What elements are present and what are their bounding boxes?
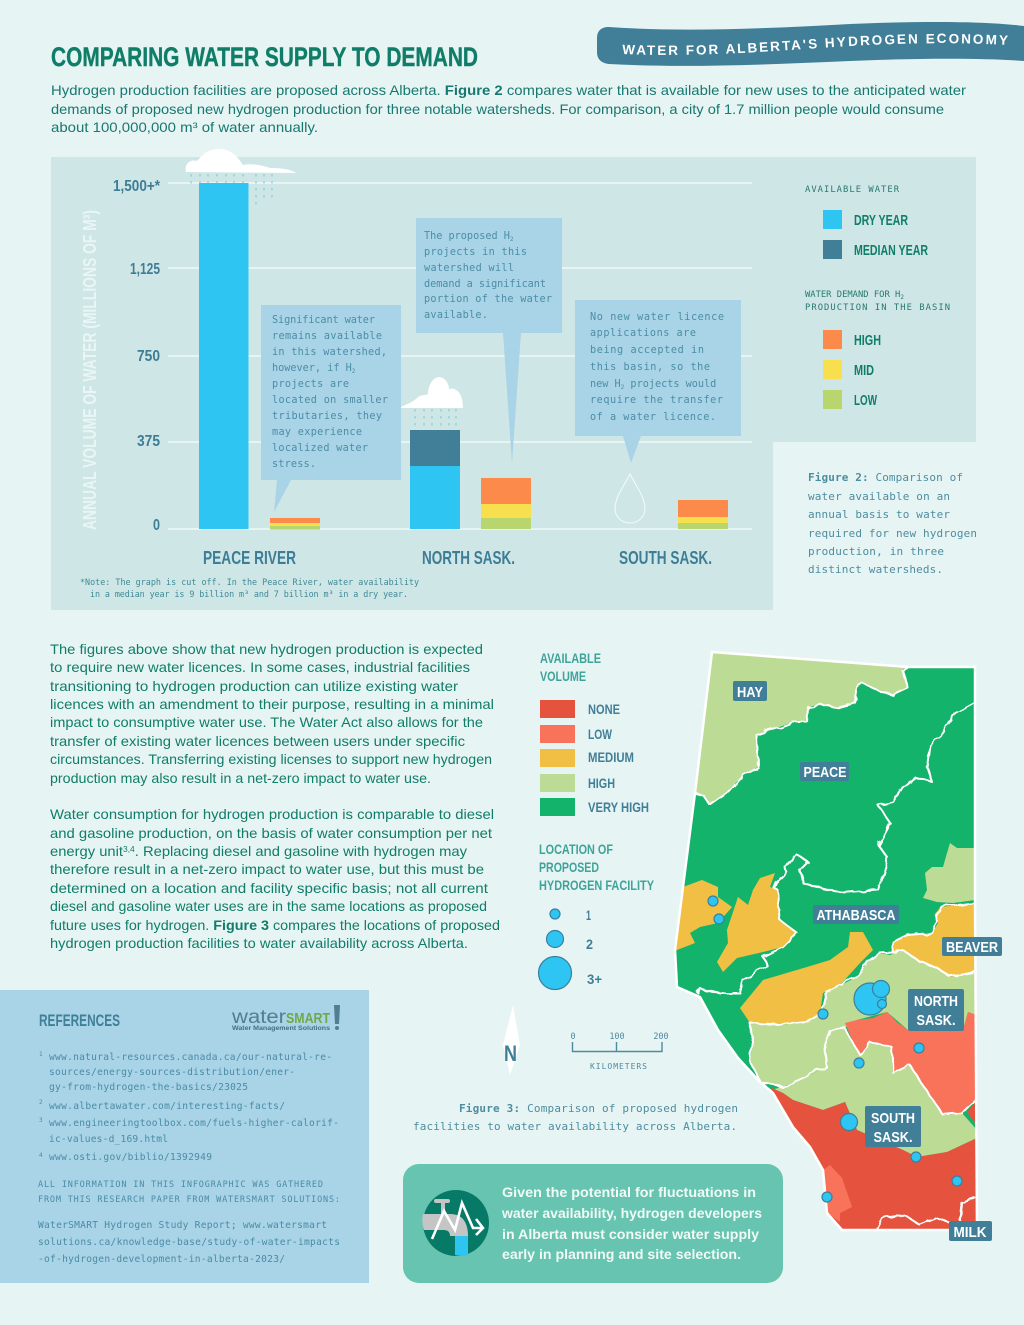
bar: North Sask demand — [481, 478, 531, 529]
footnote — [80, 577, 419, 599]
callout: North Sask: projects in this — [424, 247, 527, 258]
region: medium centre — [740, 932, 873, 1025]
y axis tick labels: 375 — [137, 433, 160, 450]
region: medium west 2 — [717, 873, 797, 972]
text block: diesel and gasoline comparison: determined on a location and facility specific basis; not all current — [50, 880, 488, 896]
icon: tap with fluctuating line — [422, 1190, 489, 1256]
map: Alberta water availability — [675, 652, 1002, 1241]
banner: water for Alberta's hydrogen economy — [597, 22, 1024, 66]
text block: diesel and gasoline comparison: and gasoline production, on the basis of water consumption per net — [50, 825, 492, 841]
legend: chart: HIGH — [854, 333, 881, 349]
banner: water for Alberta's hydrogen economy: WATER FOR ALBERTA'S HYDROGEN ECONOMY — [622, 34, 1008, 55]
bar: Peace River dry year — [199, 183, 248, 529]
scale bar: 100 — [609, 1032, 625, 1042]
callout: key takeaway: early in planning and site selection. — [502, 1247, 741, 1262]
reference list: 4 — [39, 1152, 43, 1159]
scale bar: 200 — [653, 1032, 669, 1042]
logo: waterSMART: water — [231, 1007, 287, 1028]
legend: proposed hydrogen facility: PROPOSED — [539, 859, 599, 875]
callout: North Sask: 2 — [510, 236, 514, 243]
callout: Peace River: remains available — [272, 331, 382, 342]
basin labels: SOUTH — [871, 1110, 915, 1127]
text block: new licences: licences with an amendment to their purpose, resulting in a minimal — [50, 696, 494, 712]
text block: new licences: production may also result in a net-zero impact to water use. — [50, 770, 431, 786]
callout: South Sask: require the transfer — [590, 395, 723, 406]
text block: new licences: impact to consumptive water use. The Water Act also allows for the — [50, 714, 483, 730]
figure 3 caption: facilities to water availability across Alberta. — [413, 1120, 737, 1133]
region: low southwest — [823, 1165, 852, 1222]
region: none east sliver — [967, 1100, 977, 1126]
legend: chart: 2 — [900, 294, 904, 301]
legend: available volume: VOLUME — [540, 668, 586, 684]
reference list: 1 — [39, 1051, 43, 1058]
reference list: sources/energy-sources-distribution/ener- — [49, 1067, 295, 1078]
references heading: REFERENCES — [39, 1011, 120, 1030]
region: South Sask — [770, 1028, 977, 1157]
logo: waterSMART: Water Management Solutions — [232, 1025, 330, 1032]
legend: available volume: MEDIUM — [588, 749, 634, 765]
text block: new licences: circumstances. Transferring existing licenses to support new hydrogen — [50, 751, 492, 767]
intro text block: Hydrogen production facilities are proposed across Alberta. Figure 2 compares water that is available for new uses to the anticipated water — [51, 82, 966, 98]
legend: chart: PRODUCTION IN THE BASIN — [805, 303, 950, 313]
figure 2 caption — [808, 471, 977, 576]
y axis tick labels: 0 — [153, 517, 160, 534]
icon: rain cloud over North Sask — [399, 377, 463, 430]
x axis labels: PEACE RIVER — [203, 548, 296, 568]
region: Hay — [695, 652, 908, 805]
callout: Peace River: in this watershed, — [272, 347, 387, 358]
callout: South Sask — [575, 300, 741, 463]
basin labels: NORTH — [914, 993, 958, 1010]
text block: diesel and gasoline comparison: hydrogen production facilities to water availability across Alberta. — [50, 935, 468, 951]
region: Beaver — [892, 903, 975, 977]
basin labels: BEAVER — [946, 939, 998, 956]
legend: available volume: NONE — [588, 701, 620, 717]
title: COMPARING WATER SUPPLY TO DEMAND — [51, 42, 478, 72]
legend: chart: DRY YEAR — [854, 213, 908, 229]
callout: key takeaway: water availability, hydrogen developers — [501, 1206, 762, 1221]
scale bar: 0 — [570, 1032, 576, 1042]
figure 2 caption: Figure 2: Comparison of — [808, 471, 963, 484]
panel: references — [0, 990, 369, 1283]
intro text block: about 100,000,000 m³ of water annually. — [51, 119, 318, 135]
legend: available volume: HIGH — [588, 775, 615, 791]
reference list: www.albertawater.com/interesting-facts/ — [49, 1101, 285, 1112]
legend: proposed hydrogen facility: LOCATION OF — [539, 841, 613, 857]
x axis labels — [203, 548, 712, 568]
region: North Sask — [750, 950, 976, 1087]
legend: proposed hydrogen facility: 2 — [586, 936, 593, 952]
callout: South Sask: this basin, so the — [590, 362, 710, 373]
reference list: www.osti.gov/biblio/1392949 — [49, 1152, 212, 1163]
region: low east — [845, 1012, 977, 1115]
scale bar: KILOMETERS — [590, 1062, 647, 1071]
callout: North Sask: watershed will — [424, 263, 514, 274]
icon: rain cloud over Peace River — [186, 149, 296, 206]
callout: Peace River: however, if H — [272, 363, 352, 374]
intro text block: demands of proposed new hydrogen production for three notable watersheds. For comparison, a city of 1.7 million people would consume — [51, 101, 944, 117]
callout: Peace River: tributaries, they — [272, 411, 382, 422]
callout: Peace River: projects are — [272, 379, 349, 390]
icon: empty water drop — [615, 474, 645, 523]
legend: proposed hydrogen facility: 3+ — [587, 971, 602, 987]
icon: north arrow: N — [504, 1041, 517, 1066]
figure 2 caption: required for new hydrogen — [808, 527, 977, 540]
callout: South Sask: 2 — [621, 384, 625, 391]
legend: chart: MEDIAN YEAR — [854, 243, 928, 259]
figure 2 caption: water available on an — [808, 490, 950, 503]
callout: South Sask: No new water licence — [590, 312, 724, 323]
figure 3 caption — [413, 1102, 738, 1133]
legend: chart: AVAILABLE WATER — [805, 185, 900, 195]
basin labels: MILK — [954, 1224, 987, 1241]
reference list: gy-from-hydrogen-the-basics/23025 — [49, 1082, 248, 1093]
x axis labels: NORTH SASK. — [422, 548, 515, 568]
icon: north arrow — [503, 1005, 520, 1075]
region: very high base — [675, 652, 977, 1230]
reference list: 2 — [39, 1099, 43, 1106]
callout: Peace River: localized water — [272, 443, 368, 454]
reference list: 3 — [39, 1117, 43, 1124]
basin labels: PEACE — [804, 764, 846, 781]
reference list: www.engineeringtoolbox.com/fuels-higher-calorif- — [49, 1118, 339, 1129]
callout: South Sask: applications are — [590, 328, 696, 339]
y axis tick labels — [113, 178, 161, 534]
intro text block — [51, 82, 966, 135]
callout: South Sask: of a water licence. — [590, 412, 716, 423]
basin labels: HAY — [737, 684, 763, 701]
text block: diesel and gasoline comparison: diesel and gasoline water uses are in the same locations as proposed — [50, 898, 487, 914]
y axis tick labels: 1,125 — [130, 261, 160, 278]
callout: Peace River: stress. — [272, 459, 316, 470]
callout: North Sask: available. — [424, 310, 488, 321]
text block: new licences: The figures above show that new hydrogen production is expected — [50, 641, 483, 657]
legend: chart: LOW — [854, 393, 877, 409]
callout: Peace River: located on smaller — [272, 395, 388, 406]
logo: waterSMART — [231, 1005, 340, 1032]
text block: diesel and gasoline comparison: Water consumption for hydrogen production is comparable to diesel — [50, 806, 494, 822]
x axis labels: SOUTH SASK. — [619, 548, 712, 568]
figure 2 caption: production, in three — [808, 545, 944, 558]
callout: Peace River: Significant water — [272, 315, 375, 326]
y axis tick labels: 750 — [137, 348, 160, 365]
text block: new licences: transitioning to hydrogen production can utilize existing water — [50, 678, 458, 694]
text block: diesel and gasoline comparison: future uses for hydrogen. Figure 3 compares the locations of proposed — [50, 917, 500, 933]
legend: chart: MID — [854, 363, 874, 379]
legend: available volume: LOW — [588, 726, 613, 742]
facility markers — [708, 896, 962, 1202]
source note: -of-hydrogen-development-in-alberta-2023/ — [38, 1254, 285, 1265]
y axis tick labels: 1,500+* — [113, 178, 161, 195]
callout: South Sask: projects would — [624, 379, 716, 390]
callout: North Sask: portion of the water — [424, 294, 552, 305]
callout: Peace River: 2 — [352, 368, 356, 375]
legend: available volume: AVAILABLE — [540, 650, 601, 666]
provincial outline — [675, 652, 977, 1230]
source note: FROM THIS RESEARCH PAPER FROM WATERSMART SOLUTIONS: — [38, 1195, 340, 1205]
source note: solutions.ca/knowledge-base/study-of-water-impacts — [38, 1237, 340, 1248]
basin labels — [733, 681, 1002, 1241]
panel: figure 2 chart — [51, 149, 976, 610]
basin labels: ATHABASCA — [816, 907, 896, 924]
scale bar — [570, 1032, 669, 1071]
legend: available volume: VERY HIGH — [588, 799, 649, 815]
figure 2 caption: distinct watersheds. — [808, 563, 943, 576]
callout: North Sask — [416, 218, 562, 463]
bar: Peace River demand — [270, 518, 320, 530]
bar: South Sask demand — [678, 500, 728, 529]
reference list — [39, 1051, 339, 1163]
text block: diesel and gasoline comparison: energy unit — [50, 843, 119, 859]
text block: new licences — [50, 641, 494, 786]
legend: available volume — [540, 650, 649, 816]
source note: ALL INFORMATION IN THIS INFOGRAPHIC WAS GATHERED — [38, 1180, 323, 1190]
source note: WaterSMART Hydrogen Study Report; www.watersmart — [38, 1220, 327, 1231]
callout: key takeaway: Given the potential for fluctuations in — [502, 1185, 756, 1200]
footnote: *Note: The graph is cut off. In the Peace River, water availability — [80, 577, 419, 587]
logo: waterSMART: SMART — [286, 1010, 330, 1027]
callout: key takeaway: in Alberta must consider water supply — [502, 1227, 760, 1242]
legend: chart: WATER DEMAND FOR H — [805, 290, 900, 300]
text block: new licences: transfer of existing water licences between users under specific — [50, 733, 465, 749]
reference list: www.natural-resources.canada.ca/our-natural-re- — [49, 1052, 332, 1063]
text block: diesel and gasoline comparison — [50, 806, 500, 951]
reference list: ic-values-d_169.html — [49, 1134, 168, 1145]
callout: North Sask: demand a significant — [424, 279, 546, 290]
basin labels: SASK. — [874, 1129, 912, 1146]
figure 3 caption: Figure 3: Comparison of proposed hydrogen — [459, 1102, 738, 1115]
text block: diesel and gasoline comparison: therefore result in a net-zero impact to water use, but this must be — [50, 861, 484, 877]
text block: new licences: to require new water licences. In some cases, industrial facilities — [50, 659, 470, 675]
region: medium west 1 — [675, 880, 732, 952]
source note — [38, 1180, 340, 1265]
callout: South Sask: new H — [590, 379, 621, 390]
legend: proposed hydrogen facility — [538, 841, 655, 990]
legend: proposed hydrogen facility: HYDROGEN FACILITY — [539, 877, 655, 893]
text block: diesel and gasoline comparison: . Replacing diesel and gasoline with hydrogen may — [135, 843, 467, 859]
watershed boundaries — [695, 667, 975, 1228]
callout: key takeaway — [403, 1164, 783, 1283]
bar: North Sask available — [410, 430, 460, 529]
y axis title: ANNUAL VOLUME OF WATER (MILLIONS OF M³) — [80, 210, 100, 530]
region: high-volume patch in the northeast — [923, 843, 975, 903]
text block: diesel and gasoline comparison: 3,4 — [123, 845, 135, 854]
figure 2 caption: annual basis to water — [808, 508, 950, 521]
basin labels: SASK. — [916, 1012, 956, 1029]
region: none south — [770, 1087, 977, 1230]
callout: North Sask: The proposed H — [424, 231, 510, 242]
callout: Peace River: may experience — [272, 427, 362, 438]
footnote: in a median year is 9 billion m³ and 7 billion m³ in a dry year. — [90, 589, 408, 599]
legend: proposed hydrogen facility: 1 — [586, 907, 591, 923]
callout: Peace River — [261, 305, 401, 512]
legend: chart — [805, 185, 950, 409]
callout: South Sask: being accepted in — [590, 345, 704, 356]
